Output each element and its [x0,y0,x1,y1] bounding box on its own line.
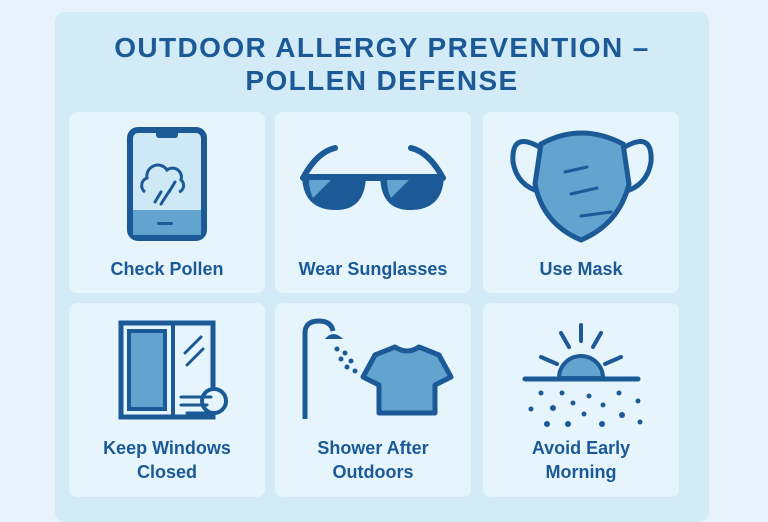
icon: sunglasses [300,145,446,210]
title [114,32,650,96]
title: OUTDOOR ALLERGY PREVENTION – [114,32,650,63]
label [103,438,231,482]
label: Wear Sunglasses [299,259,447,279]
label: Shower After [317,438,429,458]
icon: window with wind [118,320,228,420]
card: early morning [483,303,679,497]
label: Outdoors [332,462,414,482]
card: check pollen [69,112,265,293]
label: Keep Windows [103,438,231,458]
icon: mask [510,130,654,243]
card: sunglasses [275,112,471,293]
label [317,438,429,482]
label: Use Mask [539,259,623,279]
icon: shower and shirt [302,318,454,419]
label: Morning [546,462,616,482]
label: Avoid Early [532,438,630,458]
label: Closed [137,462,197,482]
label: Check Pollen [110,259,224,279]
card: windows [69,303,265,497]
icon: phone with weather [127,127,207,241]
card: mask [483,112,679,293]
card: shower [275,303,471,497]
title: POLLEN DEFENSE [245,65,519,96]
label [532,438,630,482]
icon: sunrise with pollen [522,323,642,427]
